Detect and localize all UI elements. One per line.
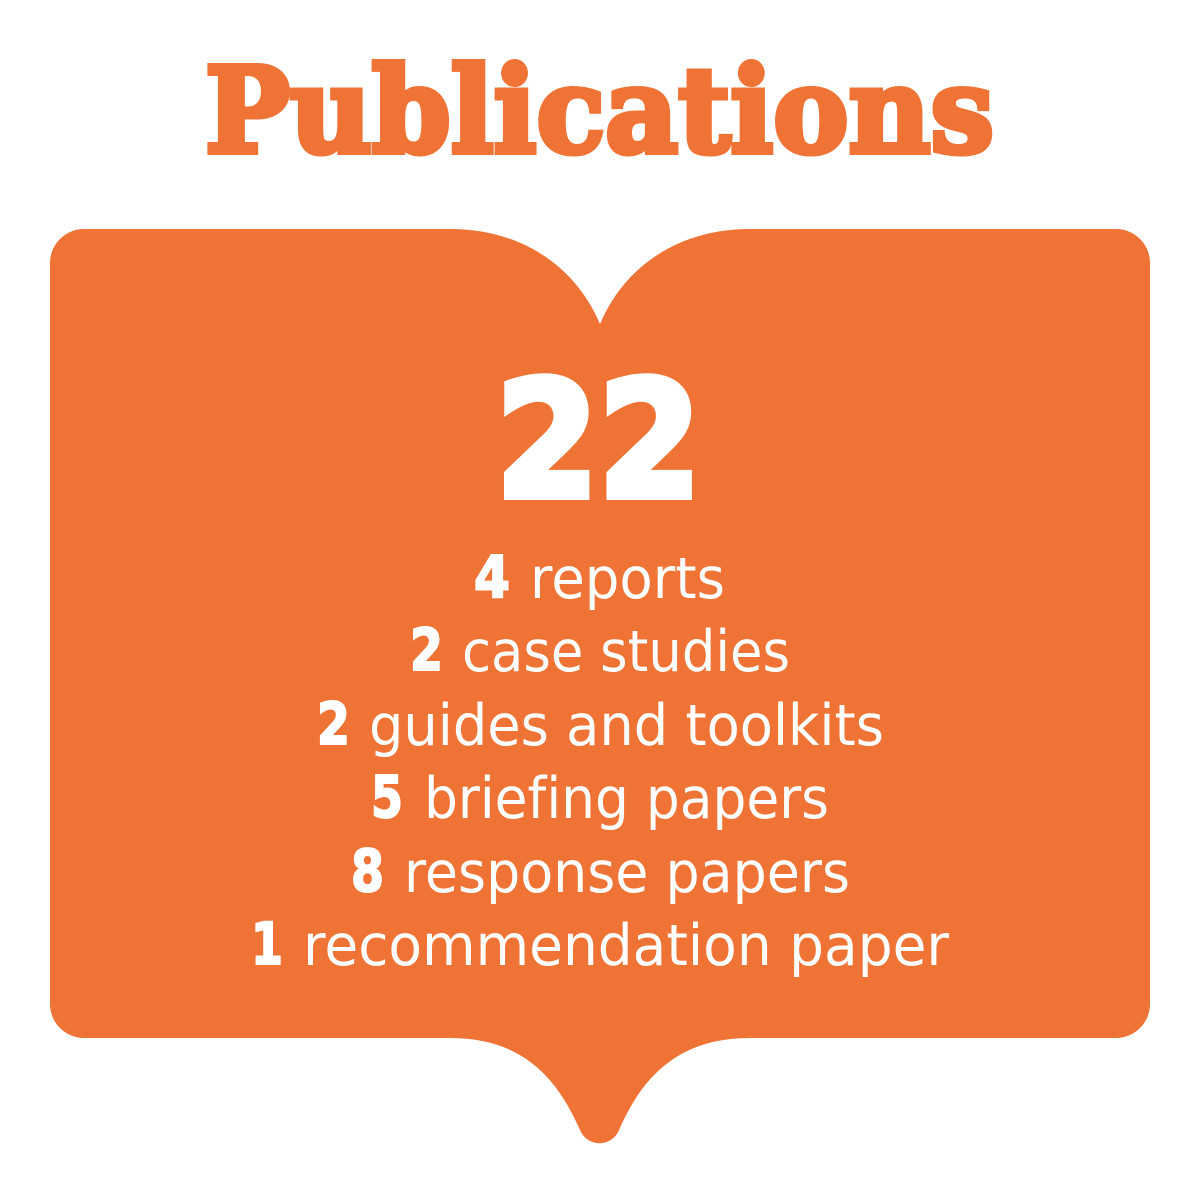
item: briefing papers: briefing papers bbox=[424, 766, 829, 832]
item: guides and toolkits: 2 bbox=[317, 690, 350, 758]
item: response papers: response papers bbox=[404, 840, 850, 906]
item: briefing papers: 5 bbox=[371, 763, 403, 831]
panel: open book shape bbox=[50, 229, 1150, 1143]
item: reports: 4 bbox=[474, 543, 510, 611]
total number: 22 bbox=[496, 347, 701, 534]
item: case studies: 2 bbox=[410, 616, 443, 684]
title: Publications bbox=[205, 41, 994, 180]
item: recommendation paper: recommendation paper bbox=[303, 913, 950, 979]
item: recommendation paper: 1 bbox=[251, 910, 283, 978]
list of publication counts bbox=[251, 543, 950, 979]
item: case studies: case studies bbox=[462, 619, 790, 685]
item: reports: reports bbox=[530, 546, 725, 612]
item: guides and toolkits: guides and toolkits bbox=[369, 693, 884, 759]
item: response papers: 8 bbox=[351, 837, 384, 905]
